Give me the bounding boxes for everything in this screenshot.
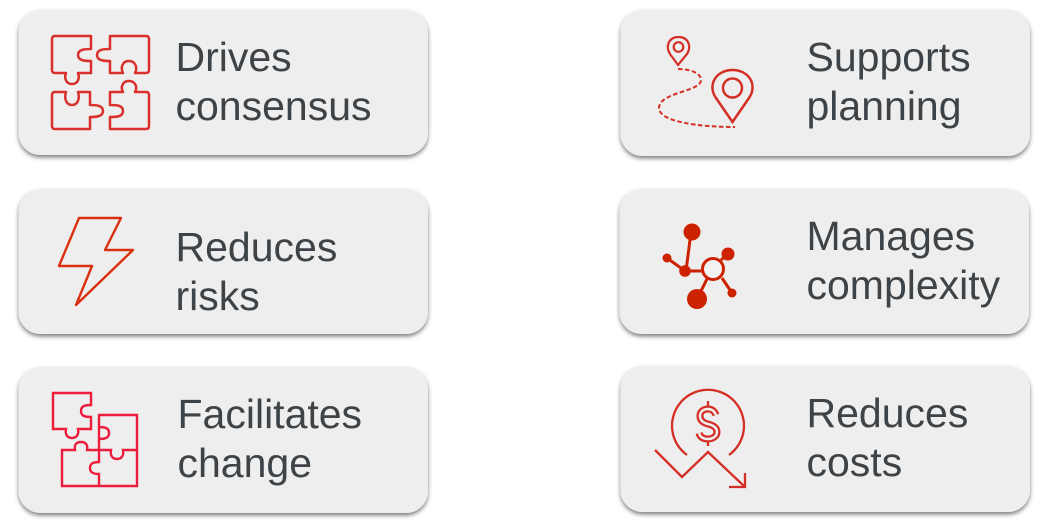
- icon: lightning bolt: [59, 218, 133, 305]
- text: reduces costs: [806, 390, 968, 485]
- text: manages complexity: [806, 213, 1001, 308]
- text: drives consensus: [176, 34, 372, 129]
- text: reduces costs: Reduces: [806, 390, 968, 436]
- text: supports planning: Supports: [806, 34, 971, 80]
- text: facilitates change: change: [178, 440, 312, 486]
- text: manages complexity: complexity: [806, 262, 1001, 308]
- text: manages complexity: Manages: [806, 213, 975, 259]
- text: facilitates change: Facilitates: [178, 391, 362, 437]
- panel: reduces risks: [18, 189, 428, 334]
- text: drives consensus: Drives: [176, 34, 292, 80]
- panel: facilitates change: [18, 367, 428, 513]
- text: facilitates change: [178, 391, 362, 486]
- text: supports planning: planning: [806, 83, 962, 129]
- text: reduces risks: [176, 224, 337, 319]
- text: reduces costs: costs: [806, 439, 902, 485]
- text: supports planning: [806, 34, 971, 129]
- panel: drives consensus: [18, 10, 428, 155]
- icon: four puzzle pieces: [52, 36, 149, 129]
- panel: reduces costs: [620, 366, 1030, 512]
- text: reduces risks: risks: [176, 273, 260, 319]
- icon: route with map pins: [659, 37, 753, 127]
- panel: supports planning: [620, 10, 1030, 156]
- text: drives consensus: consensus: [176, 83, 372, 129]
- icon: network nodes: [662, 224, 736, 309]
- panel: manages complexity: [620, 189, 1029, 334]
- icon: dollar with falling arrow: [655, 390, 745, 487]
- text: reduces risks: Reduces: [176, 224, 337, 270]
- icon: assembled puzzle pieces: [53, 393, 137, 486]
